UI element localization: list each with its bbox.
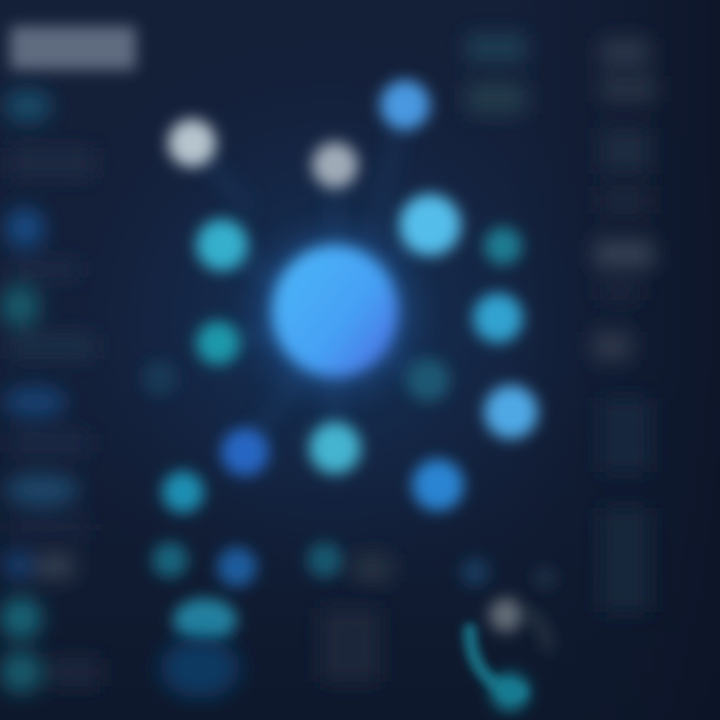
text block: left item 6 — [36, 553, 74, 579]
node: central hub glow — [259, 236, 411, 388]
heading: blurred title block — [10, 26, 136, 70]
text block: left item 4 — [10, 433, 90, 453]
text block: bottom centre blurred label — [352, 554, 392, 582]
node: blue top — [380, 80, 430, 130]
text block: left item 2 — [10, 260, 80, 278]
node: teal bottom left — [152, 542, 188, 578]
icon: left item 2 — [5, 208, 45, 248]
text block: right line 2 — [600, 128, 650, 172]
node: cyan lower centre — [309, 422, 361, 474]
node: teal bottom centre — [307, 542, 343, 578]
node: teal lower left — [162, 471, 204, 513]
text block: left item 3 — [10, 333, 95, 359]
node: central hub — [272, 245, 398, 377]
node: dim far bottom right — [534, 567, 556, 589]
text block: right line 1 — [600, 76, 656, 102]
icon: left item 4 — [3, 386, 67, 418]
text block: right heading — [600, 38, 650, 66]
node: light blue lower right — [484, 385, 538, 439]
node: royal blue lower left — [221, 428, 269, 476]
text block: left item 8 — [50, 658, 100, 686]
node: grey top centre — [312, 142, 358, 188]
icon: left item 6 — [3, 550, 33, 580]
text block: right line 6 — [592, 332, 632, 360]
node: teal upper far right — [484, 227, 522, 265]
node: dim left — [142, 360, 178, 396]
node: dim bottom right — [460, 557, 490, 587]
chart: network connector strokes — [192, 105, 430, 452]
text block: left item 5 — [10, 520, 90, 534]
icon: left item 5 — [4, 473, 80, 507]
node: blue lower right — [412, 459, 464, 511]
text block: right line 8 — [600, 508, 650, 612]
chart: network nodes — [142, 80, 556, 589]
node: white top left — [168, 119, 216, 167]
node: cyan upper left — [196, 219, 248, 271]
node: cyan middle right — [473, 293, 523, 343]
icon: left item 3 — [0, 286, 40, 326]
text block: top middle column — [466, 34, 526, 62]
text block: right line 4 — [594, 240, 654, 268]
text block: top middle column second line — [466, 82, 526, 114]
text block: bottom centre blurred lines — [320, 608, 380, 682]
icon: left item 1 — [4, 89, 52, 123]
node: dim right — [406, 358, 450, 402]
panel: right column text — [466, 34, 656, 612]
icon: left item 7 — [0, 597, 42, 639]
node: blue bottom left — [217, 547, 257, 587]
text block: right line 7 — [600, 398, 650, 472]
icon: bottom left cluster — [160, 598, 240, 698]
icon: left item 8 — [0, 651, 42, 693]
icon: bottom right phone arc — [470, 598, 548, 711]
node: cyan upper right — [399, 194, 461, 256]
text block: right line 5 — [600, 283, 640, 301]
panel: left column list — [0, 89, 100, 693]
text block: left item 1 — [10, 148, 95, 178]
node: teal middle left — [196, 321, 240, 365]
text block: right line 3 — [600, 188, 650, 214]
